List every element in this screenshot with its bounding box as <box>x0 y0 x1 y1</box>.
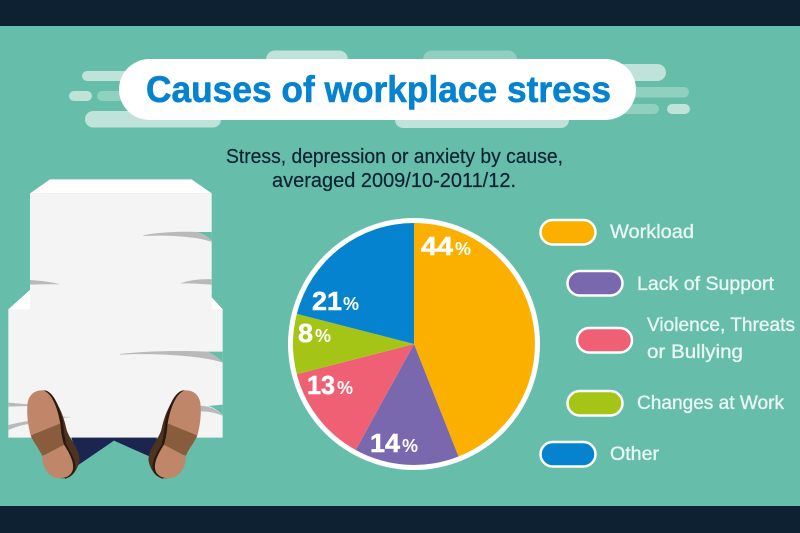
title <box>119 59 636 120</box>
trousers <box>72 438 160 467</box>
title clouds <box>69 50 690 128</box>
legend: other <box>540 442 660 466</box>
left shoe <box>27 390 79 479</box>
legend <box>540 220 795 466</box>
subtitle: averaged 2009/10-2011/12. <box>272 170 516 192</box>
legend: workload <box>540 220 694 244</box>
slice: changes at work 8% <box>293 314 414 374</box>
value labels: % <box>343 294 359 314</box>
value labels <box>298 231 471 458</box>
legend: violence, threats or bullying <box>577 315 795 363</box>
value labels: 14 <box>370 428 401 458</box>
value labels: % <box>337 378 353 398</box>
bottom bar <box>0 506 800 533</box>
slice: other 21% <box>297 223 414 344</box>
slice: lack of support 14% <box>356 344 458 465</box>
lower paper stack <box>8 290 223 438</box>
legend: violence, threats or bullying: Violence, Threats <box>647 315 795 336</box>
illustration: person under paper stacks <box>8 179 223 479</box>
top bar <box>0 0 800 26</box>
legend: lack of support <box>568 271 775 296</box>
legend: lack of support: Lack of Support <box>637 274 775 295</box>
value labels: % <box>315 326 331 346</box>
legend: violence, threats or bullying: or Bullying <box>647 342 743 363</box>
pie chart <box>288 218 540 470</box>
right shoe <box>149 390 201 479</box>
value labels: 21 <box>312 286 342 316</box>
legend: workload: Workload <box>610 222 694 243</box>
value labels: 8 <box>298 318 313 348</box>
slice: workload 44% <box>414 223 535 456</box>
upper paper stack <box>30 179 212 293</box>
legend: changes at work: Changes at Work <box>637 393 784 414</box>
subtitle: Stress, depression or anxiety by cause, <box>226 146 563 168</box>
value labels: % <box>402 436 418 456</box>
legend: changes at work <box>568 391 784 416</box>
subtitle <box>226 146 563 192</box>
legend: other: Other <box>610 444 660 465</box>
value labels: 13 <box>307 370 335 400</box>
slice: violence, threats or bullying 13% <box>297 344 414 450</box>
value labels: 44 <box>421 231 454 261</box>
value labels: % <box>455 239 471 259</box>
title: Causes of workplace stress <box>146 69 611 110</box>
